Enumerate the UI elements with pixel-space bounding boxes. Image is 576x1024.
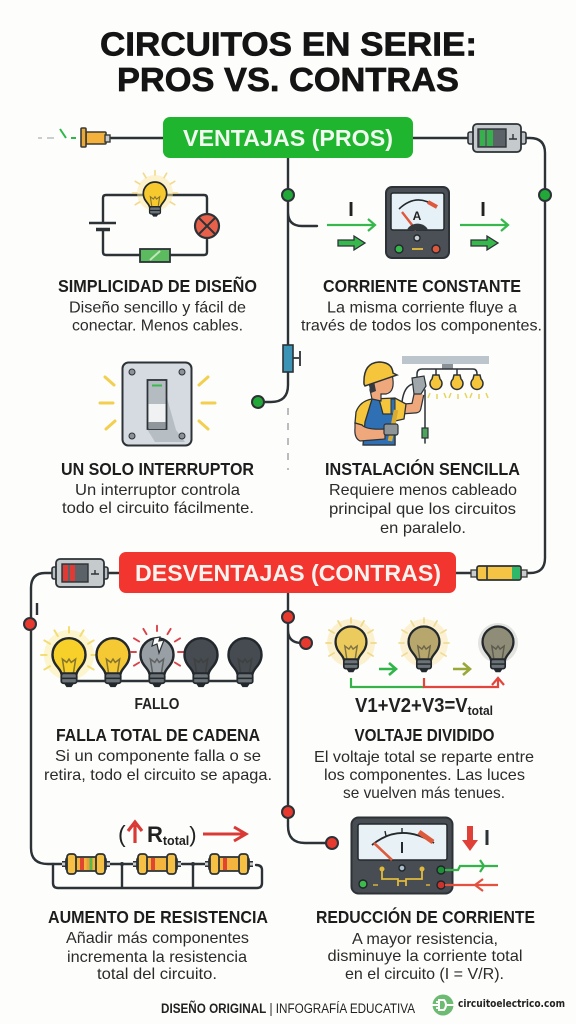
icon: battery red <box>52 559 108 587</box>
text: instalación sencilla: Requiere menos cableado <box>329 482 517 499</box>
footer credit: DISEÑO ORIGINAL | INFOGRAFÍA EDUCATIVA <box>161 1001 415 1016</box>
icon: resistance rising: ) <box>189 822 197 847</box>
text: aumento de resistencia: total del circuito. <box>97 966 217 983</box>
nodes: green connection points <box>252 189 551 408</box>
text: reducción de corriente: REDUCCIÓN DE CORRIENTE <box>316 906 535 927</box>
icon: ammeter: I <box>480 199 486 221</box>
text: voltaje dividido: los componentes. Las luces <box>324 767 525 784</box>
text: corriente constante: través de todos los componentes. <box>301 318 542 334</box>
title: PROS VS. CONTRAS <box>117 62 459 99</box>
text: un solo interruptor: UN SOLO INTERRUPTOR <box>61 459 254 479</box>
icon: resistance rising: ( <box>118 821 126 847</box>
icon: bulbs chain with failure: FALLO <box>134 696 180 713</box>
icon: bulbs chain with failure <box>41 626 262 713</box>
text: simplicidad de diseño: Diseño sencillo y fácil de <box>69 300 246 316</box>
text: aumento de resistencia: AUMENTO DE RESISTENCIA <box>48 907 268 927</box>
text: falla total de cadena: Si un componente falla o se <box>55 748 261 765</box>
label: current I <box>36 603 38 615</box>
text: reducción de corriente: en el circuito (I = V/R). <box>345 966 504 983</box>
text: voltaje dividido: se vuelven más tenues. <box>343 785 505 802</box>
text: instalación sencilla: INSTALACIÓN SENCILLA <box>325 458 520 479</box>
icon: ammeter <box>327 187 508 258</box>
text: aumento de resistencia: incrementa la resistencia <box>67 949 247 966</box>
icon: battery green <box>468 124 526 152</box>
text: falla total de cadena: retira, todo el circuito se apaga. <box>44 767 272 784</box>
text: un solo interruptor: todo el circuito fácilmente. <box>62 500 254 517</box>
formula: voltage sum: V1+V2+V3=V <box>355 695 477 717</box>
heading: desventajas banner: DESVENTAJAS (CONTRAS) <box>135 560 441 586</box>
circuit wires <box>31 138 545 864</box>
icon: simple circuit <box>89 170 219 262</box>
text: instalación sencilla: principal que los circuitos <box>329 501 516 518</box>
text: reducción de corriente <box>316 906 535 983</box>
title <box>100 26 477 99</box>
text: voltaje dividido: VOLTAJE DIVIDIDO <box>354 725 494 745</box>
icon: fuse right <box>471 566 527 580</box>
text: falla total de cadena <box>44 725 272 784</box>
nodes: red connection points <box>24 611 338 849</box>
heading: ventajas banner <box>163 117 413 158</box>
heading: ventajas banner: VENTAJAS (PROS) <box>183 125 393 151</box>
icon: broken line and fuse top-left <box>38 128 110 147</box>
text: falla total de cadena: FALLA TOTAL DE CADENA <box>56 725 260 745</box>
text: un solo interruptor <box>61 459 254 517</box>
text: aumento de resistencia: Añadir más componentes <box>66 930 249 947</box>
text: reducción de corriente: disminuye la corriente total <box>328 948 522 965</box>
text: corriente constante: CORRIENTE CONSTANTE <box>323 276 521 296</box>
text: voltaje dividido <box>314 725 534 802</box>
text: voltaje dividido: El voltaje total se reparte entre <box>314 749 534 766</box>
icon: resistance rising: total <box>163 834 189 848</box>
icon: wall switch <box>100 362 215 446</box>
text: un solo interruptor: Un interruptor controla <box>75 482 240 499</box>
text: simplicidad de diseño: SIMPLICIDAD DE DISEÑO <box>58 275 257 296</box>
footer logo <box>432 994 565 1016</box>
icon: ammeter: A <box>413 209 422 223</box>
text: corriente constante <box>301 276 542 334</box>
title: CIRCUITOS EN SERIE: <box>100 26 477 64</box>
icon: ammeter: I <box>348 199 354 221</box>
text: reducción de corriente: A mayor resistencia, <box>352 931 498 948</box>
text: corriente constante: La misma corriente fluye a <box>327 300 517 316</box>
text: simplicidad de diseño: conectar. Menos cables. <box>72 318 243 334</box>
icon: resistance rising: R <box>147 822 163 847</box>
icon: dimming bulbs <box>326 618 518 687</box>
formula: voltage sum: total <box>468 703 493 718</box>
text: simplicidad de diseño <box>58 275 257 334</box>
icon: worker installing lamps <box>355 356 489 445</box>
icon: three resistors in series <box>53 854 262 888</box>
icon: current meter <box>352 818 498 894</box>
icon: inline blue switch <box>283 345 300 372</box>
icon: resistance rising <box>118 821 246 848</box>
text: instalación sencilla <box>325 458 520 537</box>
text: instalación sencilla: en paralelo. <box>380 520 466 537</box>
text: aumento de resistencia <box>48 907 268 983</box>
heading: desventajas banner <box>119 552 456 593</box>
